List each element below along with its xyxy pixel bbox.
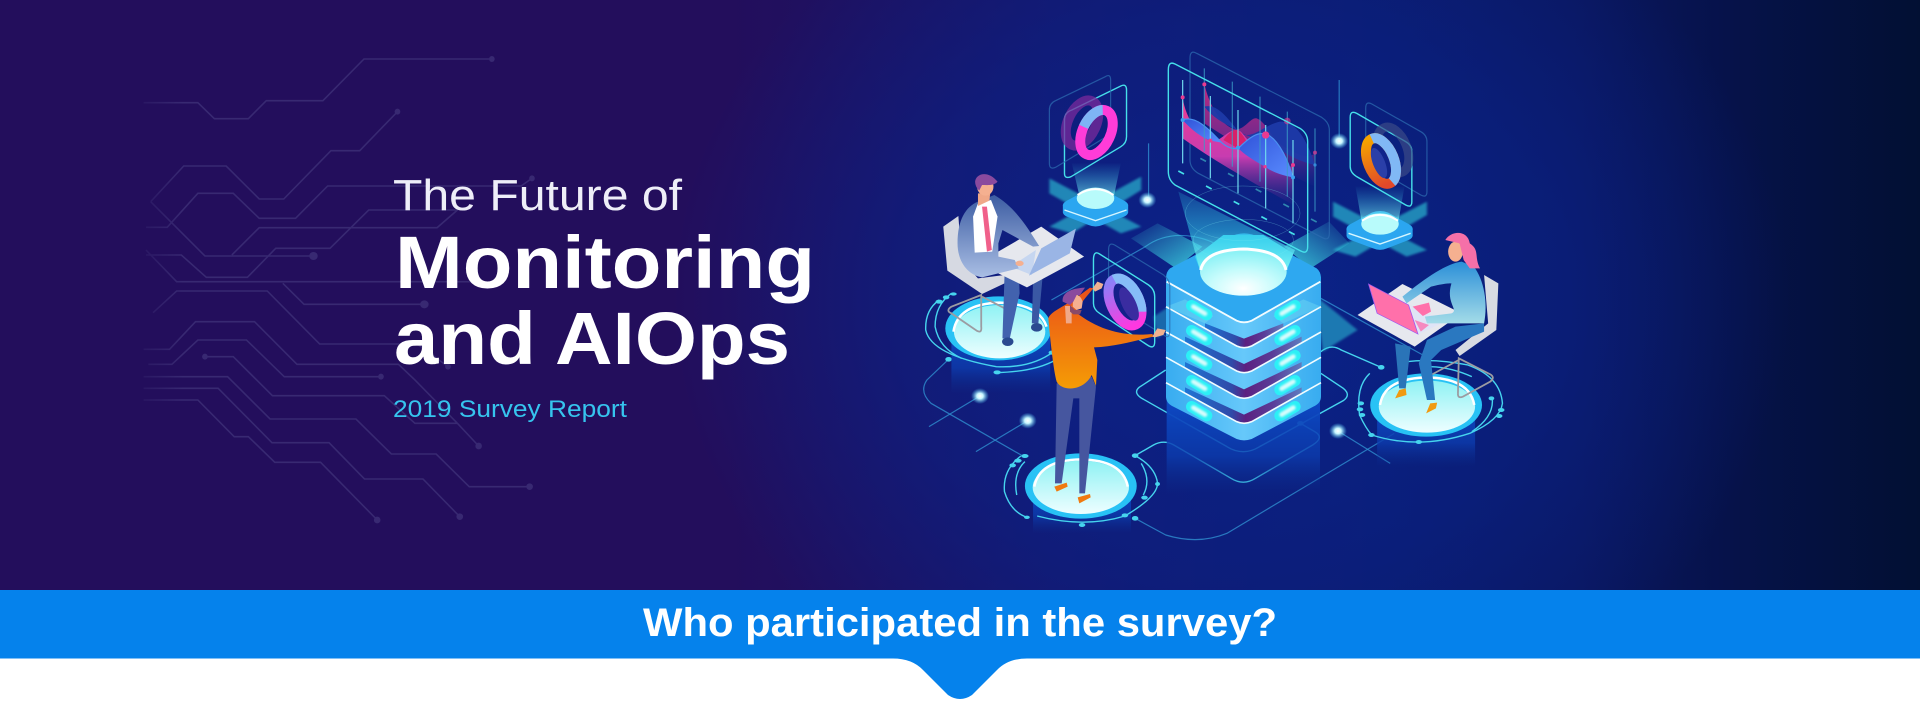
glowing light dots xyxy=(929,80,1390,463)
disc: seated man platform xyxy=(926,292,1056,393)
front area series xyxy=(1183,97,1293,205)
chart axes and ticks xyxy=(1178,68,1317,235)
server status lights xyxy=(1192,306,1295,416)
disc: seated woman platform xyxy=(1357,361,1504,467)
donut panel in front of standing man xyxy=(1093,244,1170,347)
seated man at laptop xyxy=(943,174,1084,346)
banner heading: Who participated in the survey? xyxy=(643,601,1277,645)
back area series xyxy=(1204,83,1315,187)
title line: Monitoring: Monitoring xyxy=(395,221,815,304)
section banner xyxy=(0,590,1920,699)
subtitle: 2019 Survey Report xyxy=(393,396,627,423)
left pedestal with donut xyxy=(1049,76,1141,233)
isometric illustration xyxy=(924,52,1504,540)
circuit line pattern xyxy=(144,56,535,523)
disc: standing man platform xyxy=(1004,453,1160,533)
connector lines xyxy=(924,235,1423,540)
light beams behind server xyxy=(1131,222,1358,352)
chart panels and projection cone xyxy=(1168,52,1329,296)
title line: The Future of: The Future of xyxy=(393,171,683,220)
title line: and AIOps: and AIOps xyxy=(394,297,790,380)
title xyxy=(393,171,815,380)
standing man in orange xyxy=(1048,282,1166,503)
seated woman at laptop xyxy=(1358,233,1498,413)
server stack xyxy=(1166,233,1321,493)
right pedestal with donut xyxy=(1333,103,1427,257)
